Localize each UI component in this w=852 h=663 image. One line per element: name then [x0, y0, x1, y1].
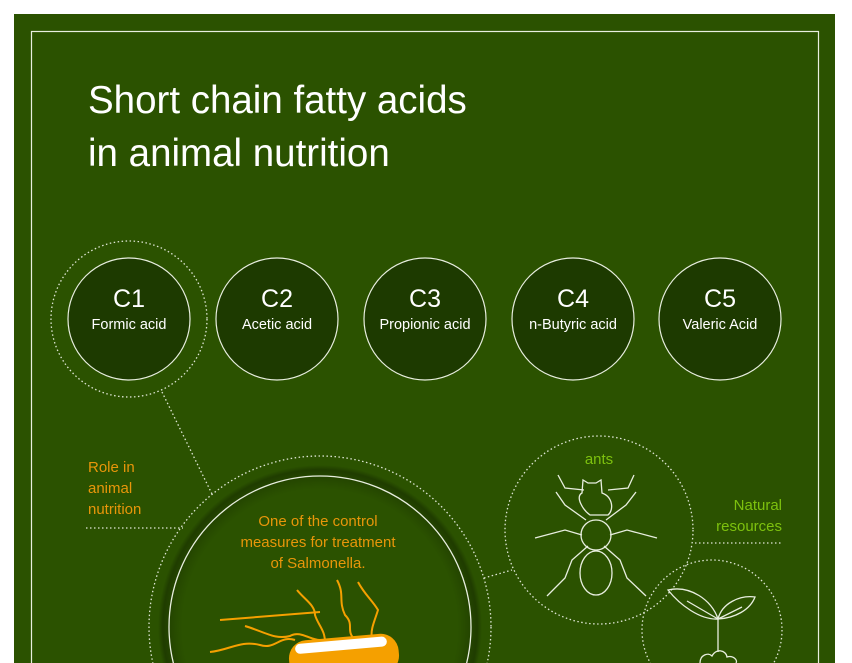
role label: nutrition — [88, 501, 141, 518]
circle: C2: Acetic acid — [242, 317, 312, 333]
circle: C4: n-Butyric acid — [529, 317, 617, 333]
role label: animal — [88, 480, 132, 497]
icon: ant — [535, 475, 657, 596]
circle: C5 — [659, 258, 781, 380]
circle: C1 — [68, 258, 190, 380]
circle: C4: C4 — [557, 285, 589, 313]
ants panel: ants — [585, 451, 613, 468]
circle: C2: C2 — [261, 285, 293, 313]
circle: C1: C1 — [113, 285, 145, 313]
circle: C1: Formic acid — [92, 317, 166, 333]
title — [88, 79, 467, 175]
title: in animal nutrition — [88, 132, 390, 175]
circle: C2 — [216, 258, 338, 380]
natural resources label — [716, 497, 782, 535]
title: Short chain fatty acids — [88, 79, 467, 122]
connector lines — [86, 392, 783, 578]
plant panel — [642, 560, 782, 663]
salmonella panel — [149, 456, 491, 663]
salmonella text: of Salmonella. — [270, 555, 366, 572]
circle: C5: C5 — [704, 285, 736, 313]
salmonella text: One of the control — [258, 513, 378, 530]
role label: Role in — [88, 459, 135, 476]
circle: C3 — [364, 258, 486, 380]
ants panel — [505, 436, 693, 624]
acid circles — [51, 241, 781, 397]
natural resources label: Natural — [734, 497, 782, 514]
natural resources label: resources — [716, 518, 782, 535]
circle: C3: C3 — [409, 285, 441, 313]
circle: C5: Valeric Acid — [683, 317, 757, 333]
circle: C4 — [512, 258, 634, 380]
icon: bacterium — [210, 580, 401, 663]
icon: plant — [668, 589, 755, 663]
role label — [88, 459, 141, 518]
salmonella text: measures for treatment — [240, 534, 396, 551]
salmonella text — [240, 513, 396, 572]
circle: C3: Propionic acid — [379, 317, 471, 333]
